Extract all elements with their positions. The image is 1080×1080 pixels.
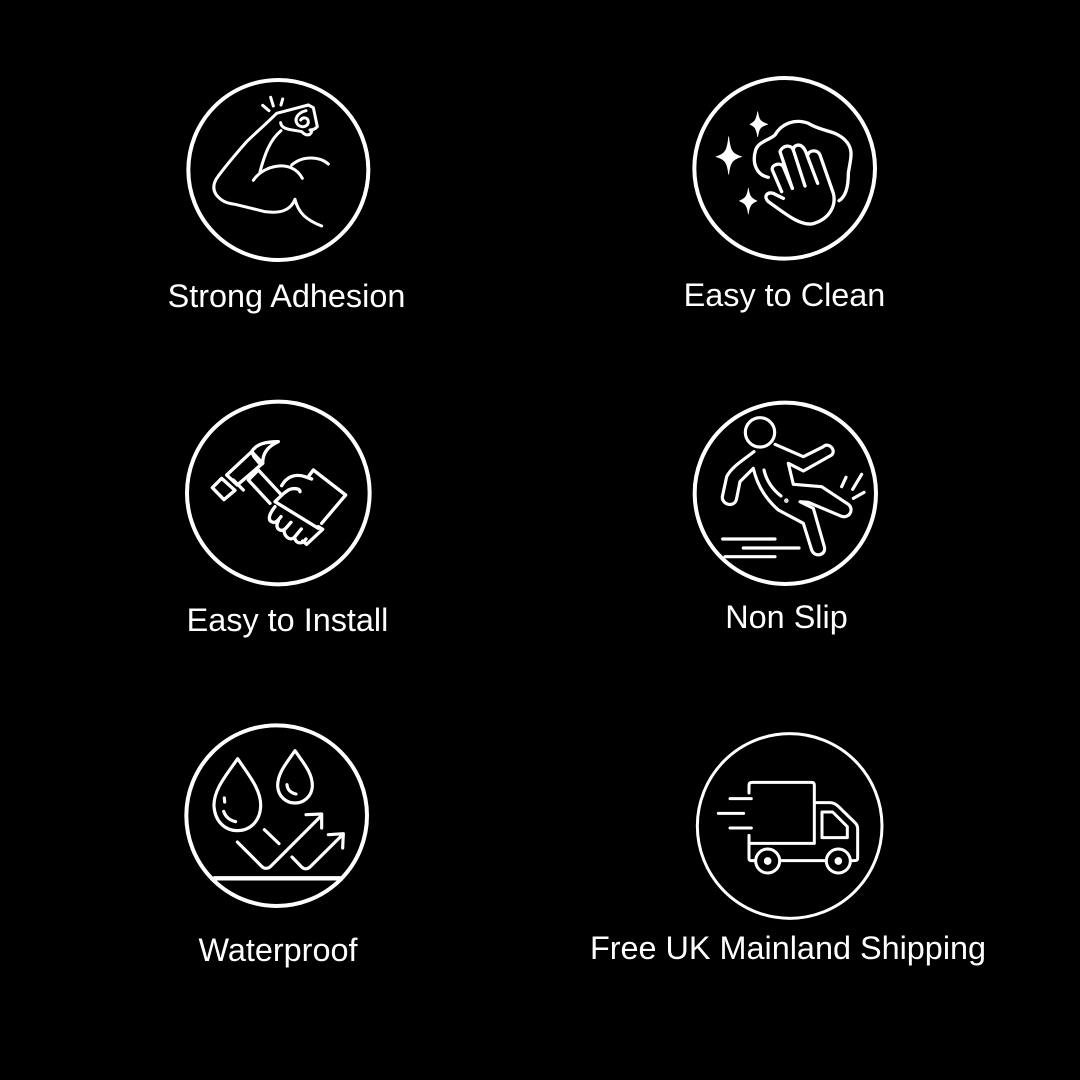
label: Easy to Install: Easy to Install	[187, 602, 388, 638]
label: Non Slip: Non Slip	[725, 599, 848, 635]
label: Waterproof: Waterproof	[198, 932, 359, 968]
icon: hand wiping with sparkles in circle	[694, 78, 875, 259]
label: Easy to Clean: Easy to Clean	[684, 277, 885, 313]
icon: delivery truck in circle	[697, 734, 882, 918]
icon: hand holding hammer in circle	[187, 402, 370, 584]
label: Strong Adhesion: Strong Adhesion	[168, 278, 405, 314]
icon: strong arm in circle	[188, 80, 368, 260]
label: Free UK Mainland Shipping: Free UK Mainland Shipping	[590, 930, 986, 966]
icon: water drops and repelling arrows in circle	[186, 725, 367, 906]
icon: person slipping in circle	[695, 403, 876, 584]
